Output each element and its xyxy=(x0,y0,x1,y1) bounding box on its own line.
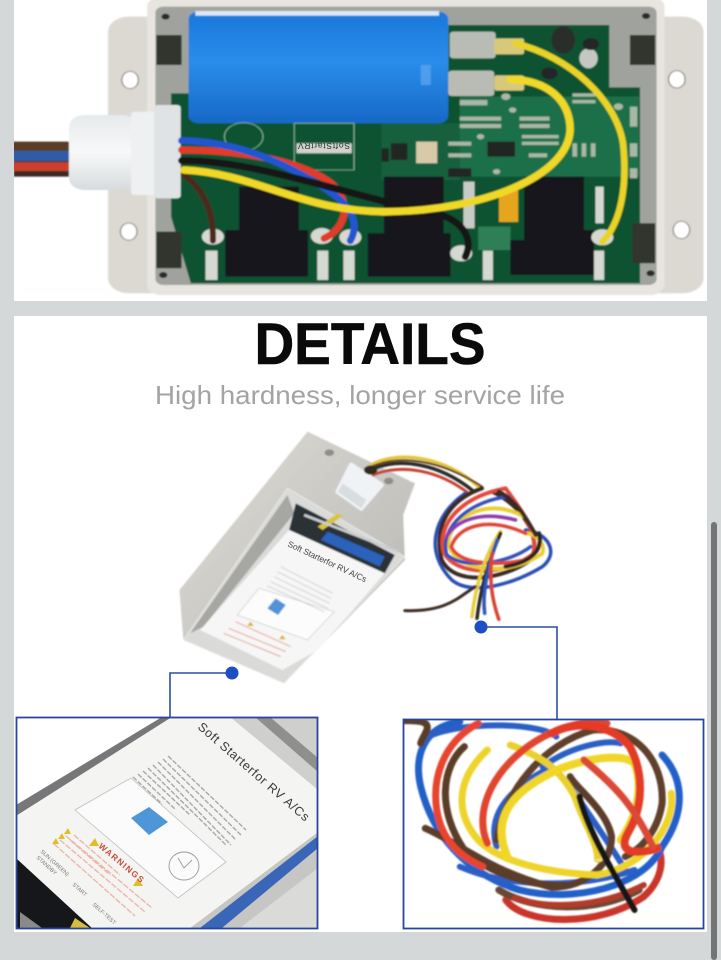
cover bottom right xyxy=(190,832,318,928)
connector: enclosure to label zoom xyxy=(170,666,238,717)
detail panel border: wire close-up xyxy=(404,720,704,928)
enclosure mounting flange xyxy=(108,17,703,293)
circuit diagram box xyxy=(75,778,226,898)
outgoing cable bundle xyxy=(14,142,71,177)
red wire xyxy=(182,150,344,238)
integrated circuit chips xyxy=(382,26,599,177)
product label card xyxy=(200,530,385,670)
clear cover xyxy=(183,488,405,683)
photo: open enclosure with circuit board xyxy=(14,0,703,295)
yellow wire to lower terminal xyxy=(184,79,570,212)
blue outer wire xyxy=(419,722,679,895)
led labels: STANDBY xyxy=(35,855,58,877)
card title large: Soft Starterfor RV A/Cs xyxy=(195,720,312,824)
black wire xyxy=(182,161,468,257)
yellow wires xyxy=(462,750,672,875)
cover top left edge xyxy=(16,717,172,816)
label warning lines xyxy=(224,622,291,657)
screws xyxy=(159,13,655,278)
black wire xyxy=(579,797,635,910)
relays xyxy=(225,177,594,277)
warning triangles xyxy=(247,622,286,639)
label text lines xyxy=(267,567,333,612)
yellow capacitor block xyxy=(499,190,518,222)
instructions text lines xyxy=(133,756,246,845)
plate bolts xyxy=(325,449,393,484)
warning text lines xyxy=(54,835,152,916)
yellow wire to upper terminal xyxy=(515,43,624,242)
label card title: Soft Starterfor RV A/Cs xyxy=(286,539,368,584)
blue wire xyxy=(182,141,354,241)
blue module xyxy=(131,807,168,835)
led labels: START xyxy=(71,882,88,899)
warning heading: WARNINGS xyxy=(97,841,146,885)
board circuit symbol xyxy=(224,123,354,170)
spade terminals xyxy=(448,32,524,96)
blue inner wires xyxy=(428,725,635,883)
brown wires xyxy=(405,721,566,885)
cavity corner posts xyxy=(156,35,655,268)
subheading: High hardness, longer service life xyxy=(155,380,565,410)
silver heatsink strip xyxy=(463,182,475,228)
detail panel border: label close-up xyxy=(16,718,318,928)
gland on enclosure xyxy=(338,465,381,508)
detail panel: label close-up xyxy=(16,717,318,928)
panel: top product photo xyxy=(14,0,707,301)
panel: details section xyxy=(14,316,707,932)
wire loops tangled xyxy=(439,488,543,578)
wire loop: blue outer xyxy=(435,493,551,588)
board silk label xyxy=(297,143,352,153)
steel back plate xyxy=(179,432,415,683)
detail panel: wire close-up xyxy=(403,719,704,928)
brown wire xyxy=(184,175,213,241)
red wire bottom xyxy=(506,847,661,920)
led labels xyxy=(35,849,117,927)
brown wire bottom xyxy=(499,890,639,907)
led labels: SELF-TEST xyxy=(91,902,117,927)
surface mount components xyxy=(448,93,637,223)
warning triangles xyxy=(52,828,143,886)
label diagram box xyxy=(237,588,334,640)
scrollbar xyxy=(711,522,717,960)
label card surface xyxy=(16,717,318,928)
dark lower left corner xyxy=(16,858,92,928)
heading: DETAILS: DETAILS xyxy=(254,312,486,377)
wire bundle from gland xyxy=(371,457,482,493)
board silk text: SoftStartRV xyxy=(298,141,350,151)
red wires xyxy=(436,723,483,867)
solder pads xyxy=(202,228,613,280)
mounting holes xyxy=(120,71,690,240)
motor symbol xyxy=(169,852,199,880)
cover left wall shade xyxy=(190,495,294,633)
wire loose ends xyxy=(405,532,500,619)
circuit board xyxy=(171,25,640,283)
blue capacitor xyxy=(189,11,448,123)
dark interior with capacitor xyxy=(289,503,395,573)
led labels: SUN (GREEN) xyxy=(39,849,70,878)
cable gland xyxy=(69,105,181,198)
enclosure inner cavity xyxy=(155,7,657,285)
clear cover top right xyxy=(230,717,318,790)
photo: closed enclosure with wires xyxy=(179,432,551,683)
enclosure body xyxy=(147,0,664,295)
label blue square xyxy=(267,598,286,615)
wire end caps xyxy=(595,858,603,862)
cover rim highlight xyxy=(304,515,398,552)
connector: wires to wire zoom xyxy=(474,620,557,719)
